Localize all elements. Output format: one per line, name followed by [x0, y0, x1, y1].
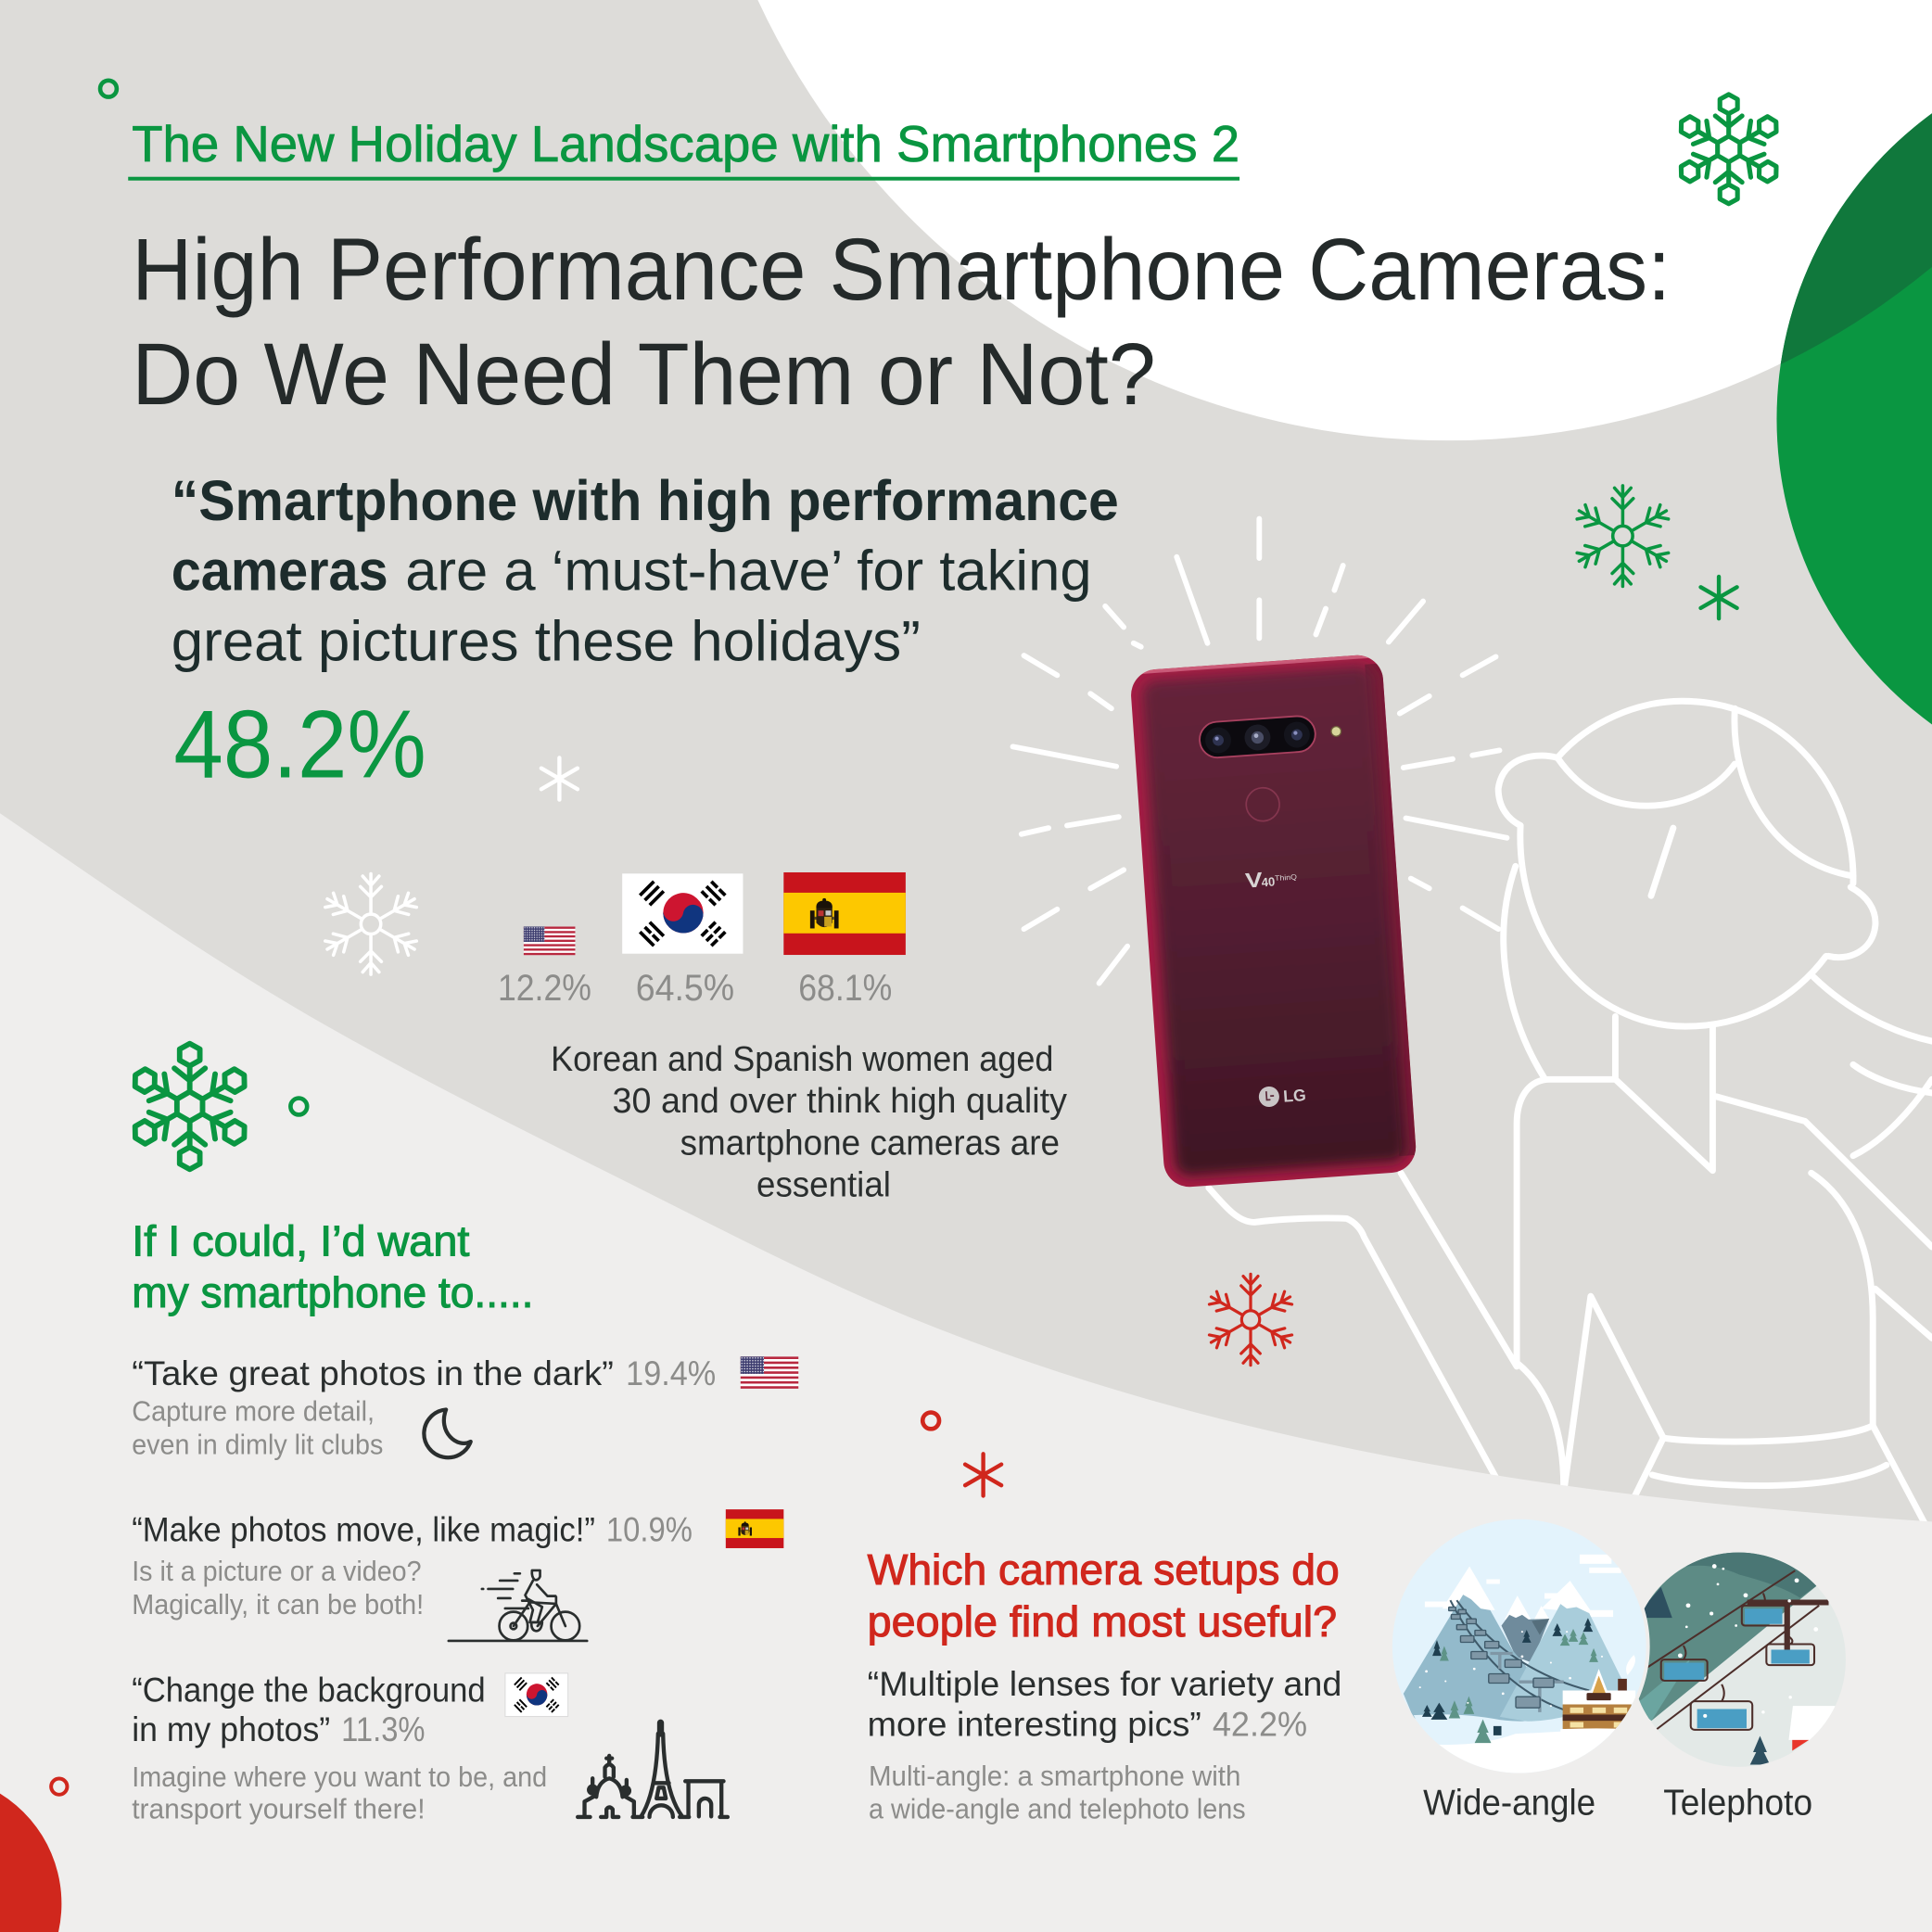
flag: Korea [505, 1673, 568, 1717]
heading: camera setups: people find most useful? [868, 1597, 1337, 1646]
LG logo [1258, 1084, 1306, 1108]
item: change the background: in my photos” [132, 1710, 330, 1748]
flag: USA [741, 1356, 798, 1389]
text: women aged 30 and over: Korean and Spanish women aged [551, 1040, 1053, 1079]
text: multi-angle description [869, 1760, 1246, 1825]
item: photos in the dark: 19.4% [626, 1354, 716, 1392]
model logo: ThinQ [1275, 872, 1297, 883]
text: women aged 30 and over: essential [756, 1166, 891, 1205]
description: Imagine where you want to be, and [132, 1761, 547, 1793]
quote: must-have statement: great pictures these holidays” [172, 609, 921, 672]
lower light panel [0, 813, 1932, 1932]
rays: burst around the phone [1013, 519, 1506, 984]
quote: multiple lenses: “Multiple lenses for variety and [868, 1664, 1341, 1703]
caption: telephoto: Telephoto [1663, 1784, 1812, 1824]
item: motion photos [132, 1509, 783, 1641]
icon: white thin snowflake [322, 874, 420, 974]
camera module [1199, 715, 1316, 758]
flag: USA [524, 926, 575, 955]
description: transport yourself there! [132, 1794, 426, 1825]
text: multi-angle description: a wide-angle and telephoto lens [869, 1794, 1246, 1825]
quote: must-have statement: “Smartphone with high performance [172, 469, 1119, 532]
main heading: Do We Need Them or Not? [132, 325, 1156, 423]
flag: Spain [783, 872, 906, 955]
description: even in dimly lit clubs [132, 1429, 383, 1460]
description [132, 1556, 424, 1621]
phone: LG V40 ThinQ back [1129, 654, 1417, 1188]
description [132, 1395, 383, 1460]
decoration: red ring centre [922, 1413, 939, 1429]
icon: white asterisk [541, 757, 578, 800]
quote: must-have statement: cameras [172, 540, 388, 603]
series title with underline: The New Holiday Landscape with Smartphones 2 [132, 116, 1239, 172]
description: Is it a picture or a video? [132, 1556, 422, 1587]
item: motion photos: “Make photos move, like magic!” [132, 1510, 595, 1549]
icon: red thin snowflake [1206, 1274, 1295, 1366]
icon: green hex snowflake left [128, 1044, 252, 1169]
item: photos in the dark: “Take great photos in the dark” [132, 1354, 614, 1392]
decoration: small ring left [290, 1099, 307, 1114]
illustration: telephoto view [1639, 1552, 1846, 1767]
quote: multiple lenses: 42.2% [1213, 1705, 1307, 1744]
item: photos in the dark [132, 1354, 798, 1460]
LG logo: LG [1282, 1086, 1306, 1106]
heading: If I could [132, 1216, 533, 1316]
heading: If I could: If I could, I’d want [132, 1216, 469, 1265]
model logo: 40 [1261, 874, 1276, 889]
flag: Spain [726, 1509, 783, 1548]
heading: camera setups [868, 1545, 1340, 1646]
caption: wide-angle: Wide-angle [1423, 1784, 1595, 1824]
fingerprint sensor [1245, 787, 1280, 822]
model logo [1244, 866, 1298, 893]
item: motion photos: 10.9% [606, 1510, 693, 1549]
item: change the background: “Change the background [132, 1670, 486, 1709]
decoration: red ring bottom left [51, 1779, 67, 1795]
red corner circle [0, 1794, 61, 1932]
description: Capture more detail, [132, 1395, 375, 1427]
heading: camera setups: Which camera setups do [868, 1545, 1340, 1594]
main heading: High Performance Smartphone Cameras: [132, 221, 1671, 318]
text: women aged 30 and over [551, 1040, 1067, 1205]
icon: cyclist [449, 1570, 587, 1641]
flag: Korea [622, 873, 743, 954]
flash [1331, 726, 1341, 737]
illustration: outline person holding phone [1209, 701, 1932, 1528]
green circle right edge [1776, 113, 1932, 725]
quote: multiple lenses: more interesting pics” [868, 1705, 1201, 1744]
item: change the background [132, 1670, 728, 1825]
icon: Paris landmarks [578, 1722, 728, 1817]
quote: must-have statement [172, 469, 1119, 672]
white arc top right [757, 0, 1932, 440]
icon: green asterisk [1701, 577, 1737, 618]
model logo: V [1244, 868, 1264, 893]
country percentages: 64.5% [636, 968, 734, 1009]
icon: moon [424, 1409, 471, 1457]
country percentages [498, 968, 892, 1009]
icon: green thin snowflake [1574, 486, 1671, 586]
heading: If I could: my smartphone to..... [132, 1268, 533, 1316]
text: women aged 30 and over: 30 and over think high quality [613, 1082, 1067, 1121]
decoration: small ring top left [100, 81, 117, 97]
illustration: wide-angle view [1388, 1514, 1650, 1777]
big stat 48.2%: 48.2% [173, 691, 426, 798]
text: women aged 30 and over: smartphone cameras are [680, 1124, 1060, 1163]
quote: must-have statement: are a ‘must-have’ for taking [405, 540, 1092, 603]
country percentages: 68.1% [798, 968, 892, 1009]
description: Magically, it can be both! [132, 1589, 424, 1621]
country percentages: 12.2% [498, 968, 591, 1009]
halo around wide-angle circle [1389, 1516, 1650, 1777]
icon: red asterisk [965, 1454, 1001, 1496]
text: multi-angle description: Multi-angle: a smartphone with [869, 1760, 1240, 1792]
item: change the background: 11.3% [341, 1710, 426, 1748]
quote: multiple lenses [868, 1664, 1341, 1744]
main heading [132, 221, 1671, 423]
flags and country percentages [498, 872, 906, 1009]
description [132, 1761, 547, 1825]
icon: green hex snowflake top right [1674, 95, 1783, 204]
